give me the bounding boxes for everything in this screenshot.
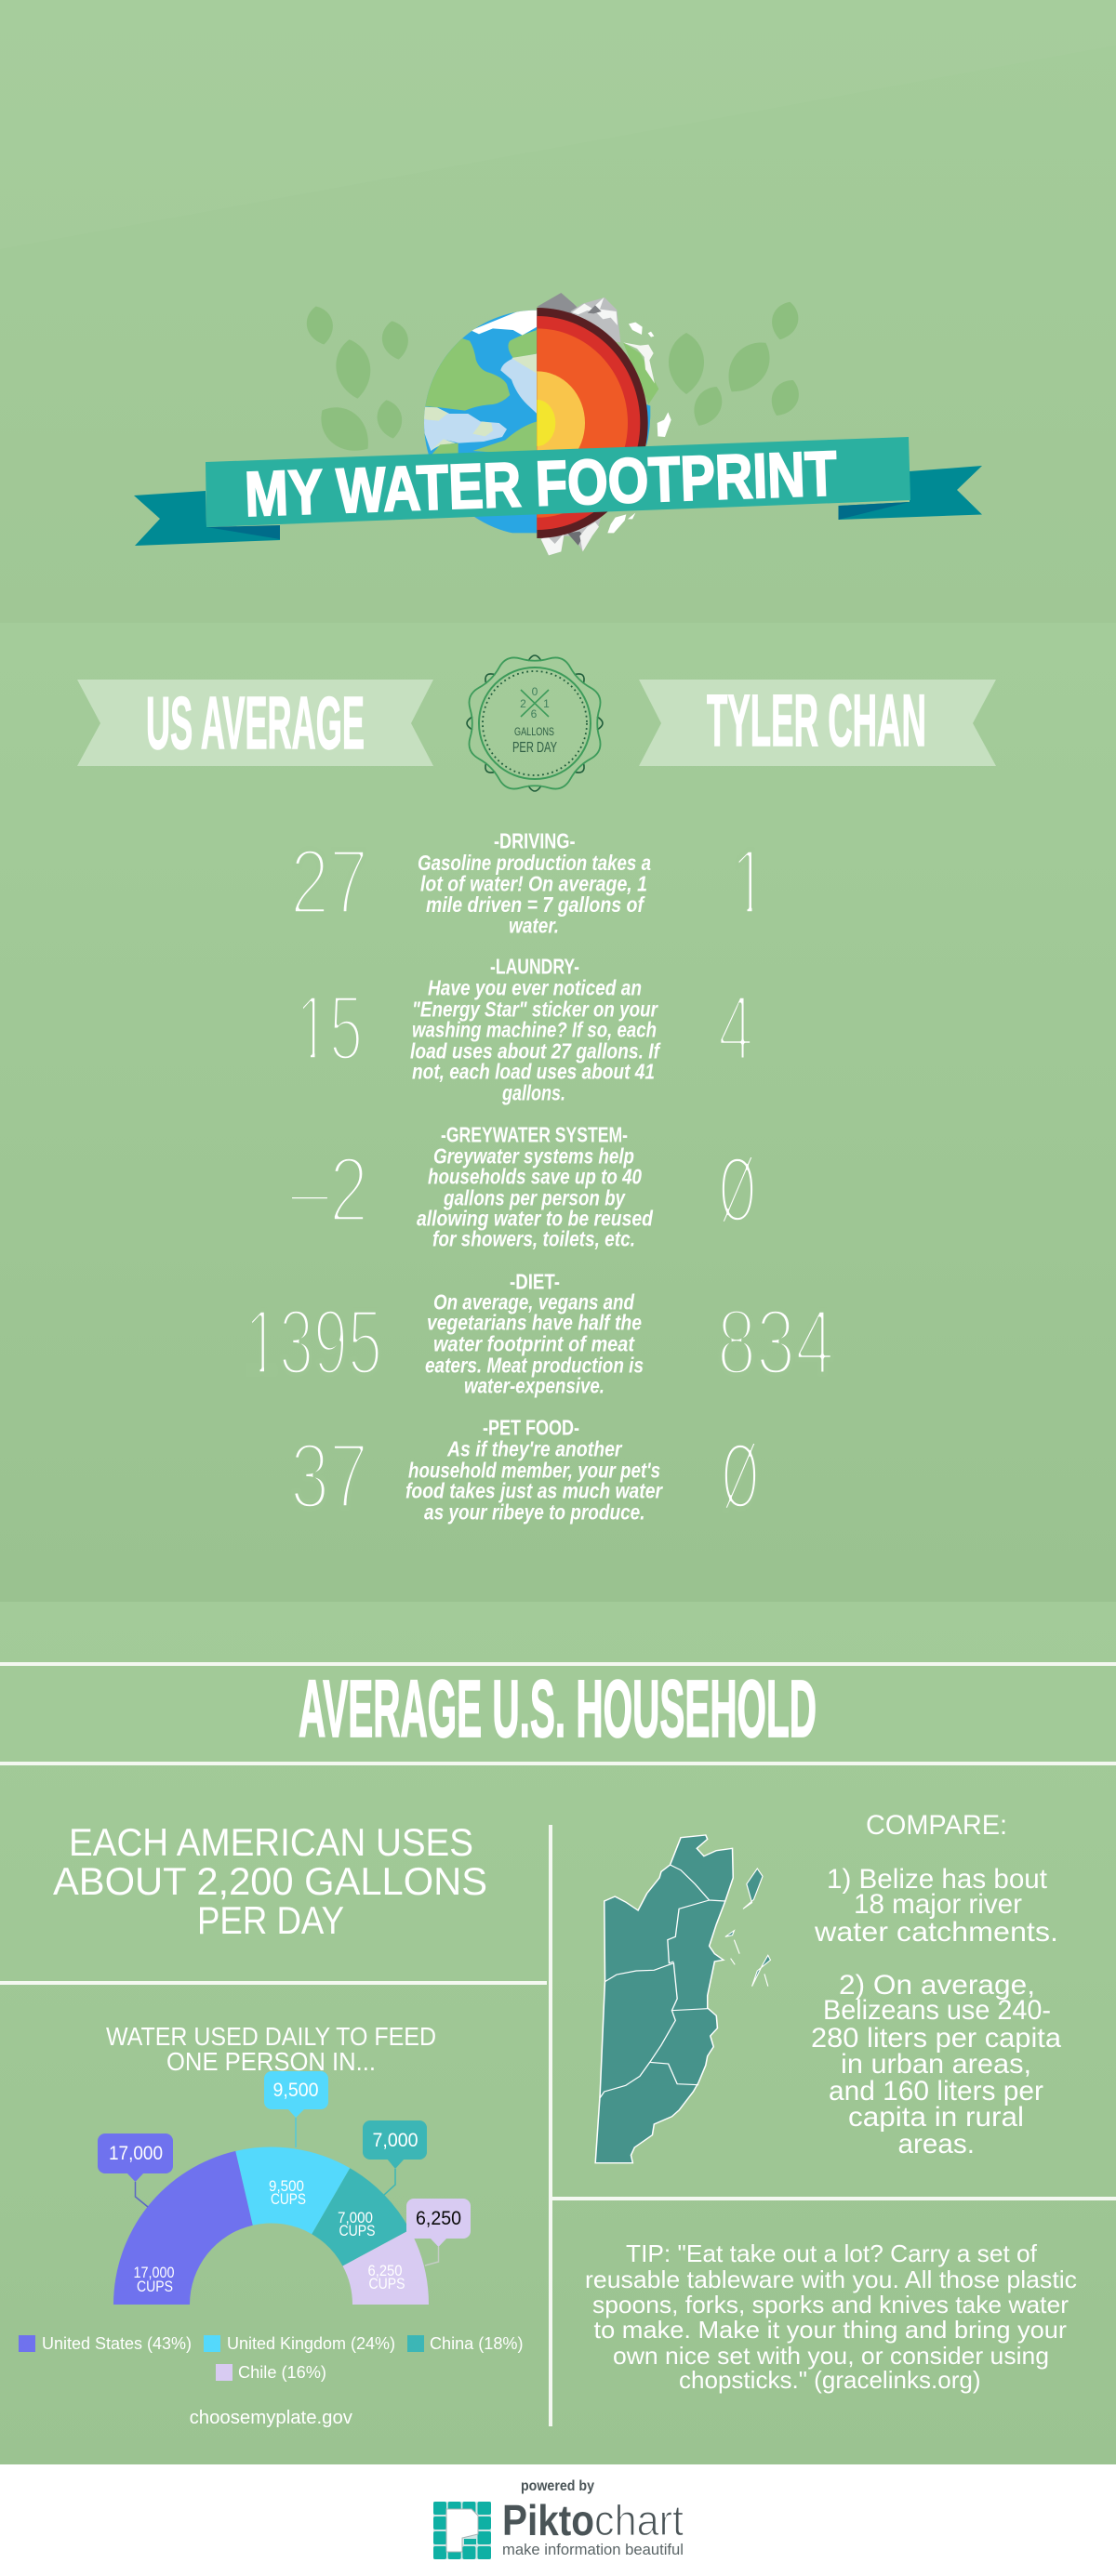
banner: Tyler Chan [639,679,996,766]
panel: tip: own nice set with you, or consider using [613,2342,1049,2370]
badge: 2016 gallons per day: 2 [520,697,526,710]
personal value: Ø [719,1138,756,1242]
legend: Chile (16%) [238,2362,326,2382]
description: as your ribeye to produce. [424,1500,645,1525]
title text: MY WATER FOOTPRINT [244,438,838,530]
semi-donut chart [113,2147,429,2305]
legend: United Kingdom (24%) [227,2333,395,2353]
description: washing machine? If so, each [412,1017,657,1041]
description: for showers, toilets, etc. [432,1227,635,1251]
row: pet food [290,1415,759,1528]
description: -DRIVING- [494,829,575,853]
background: household section [0,1602,1116,2464]
callout: 17,000 [98,2133,173,2207]
description [425,1270,644,1398]
description: gallons per person by [443,1186,626,1210]
description: On average, vegans and [433,1290,635,1314]
panel: compare Belize: 1) Belize has bout [827,1864,1048,1895]
description: load uses about 27 gallons. If [410,1039,661,1063]
US value: 1395 [245,1290,382,1394]
panel: compare Belize: Belizeans use 240- [823,1995,1051,2026]
badge: 2016 gallons per day: 1 [543,697,550,710]
badge: 2016 gallons per day [467,655,603,791]
description: allowing water to be reused [417,1207,654,1231]
description [418,829,651,937]
panel: per person use: PER DAY [197,1898,344,1942]
ribbon right tail [839,466,982,520]
description: -DIET- [510,1270,560,1294]
semi-donut chart: CUPS [339,2222,376,2239]
description: water. [509,913,559,937]
personal value: 1 [731,830,767,934]
semi-donut chart: 7,000 [338,2209,373,2226]
panel: tip: chopsticks." (gracelinks.org) [679,2366,980,2394]
panel: compare Belize: water catchments. [814,1917,1058,1948]
panel: tip [585,2239,1077,2394]
US value [245,1290,382,1394]
description: gallons. [501,1080,565,1104]
US value: 15 [296,976,363,1080]
panel: water used to feed one person [19,2022,523,2428]
semi-donut chart: 9,500 [269,2177,304,2195]
panel: tip: spoons, forks, sporks and knives take water [592,2291,1069,2318]
description: water-expensive. [464,1374,604,1398]
description: Greywater systems help [433,1143,634,1168]
US value: 27 [290,830,368,934]
badge: 2016 gallons per day: GALLONS [514,725,554,738]
tagline: make information beautiful [502,2541,684,2558]
personal value: 834 [717,1290,834,1394]
panel: compare Belize: COMPARE: [866,1810,1007,1841]
description [410,954,661,1104]
panel: tip: to make. Make it your thing and bring your [593,2316,1067,2344]
chart title: WATER USED DAILY TO FEED [106,2022,436,2051]
semi-donut chart: CUPS [368,2275,405,2292]
badge: 2016 gallons per day: 0 [532,685,538,698]
powered by: powered by [521,2478,594,2494]
title ribbon [134,437,982,546]
chart title [106,2022,436,2076]
US value [296,976,363,1080]
white cloud puffs [607,323,671,533]
callout: 17,000: 17,000 [109,2143,163,2164]
semi-donut chart: CUPS [271,2190,306,2208]
panel: compare Belize: 2) On average, [839,1970,1035,2001]
panel: compare Belize: and 160 liters per [829,2076,1043,2107]
panel: per person use [53,1820,487,1942]
description: -PET FOOD- [483,1415,579,1439]
callout: 7,000 [363,2120,427,2195]
description: As if they're another [446,1437,622,1461]
panel: compare Belize: in urban areas, [841,2049,1031,2080]
callout: 9,500 [264,2071,328,2147]
personal value: Ø [722,1424,759,1528]
legend: China (18%) [430,2333,523,2353]
semi-donut chart: 6,250 [368,2262,402,2279]
background: header section [0,0,1116,623]
footer: Piktochart logo [433,2478,684,2559]
illustration: earth globe [418,293,671,555]
core half [537,308,648,538]
description: Gasoline production takes a [418,851,651,875]
panel: per person use: EACH AMERICAN USES [69,1820,473,1864]
wordmark: chart [594,2496,684,2544]
description: -LAUNDRY- [490,954,579,978]
callout: 6,250 [406,2199,471,2266]
description [417,1123,654,1251]
personal value: 4 [718,976,753,1080]
description: food takes just as much water [405,1478,663,1502]
callout: 7,000: 7,000 [372,2130,418,2151]
panel: compare Belize [811,1810,1061,2160]
US value: 37 [290,1424,368,1528]
description [405,1415,663,1525]
description: not, each load uses about 41 [412,1060,655,1084]
row: driving [290,829,774,937]
chart title: ONE PERSON IN... [166,2047,376,2076]
panel: tip: reusable tableware with you. All those plastic [585,2266,1077,2293]
source: choosemyplate.gov [190,2408,352,2428]
panel: compare Belize: 280 liters per capita [811,2023,1061,2054]
description: eaters. Meat production is [425,1354,644,1378]
panel: tip: TIP: "Eat take out a lot? Carry a set of [626,2239,1038,2267]
background: comparison section [0,623,1116,1602]
ribbon left tail [134,491,280,546]
callout: 6,250: 6,250 [416,2208,461,2229]
panel: compare Belize: areas. [898,2129,975,2160]
map: Belize [595,1835,770,2163]
description: "Energy Star" sticker on your [412,997,658,1021]
legend: United States (43%) [42,2333,192,2353]
section heading: average U.S. household [0,1662,1116,1765]
panel: compare Belize: capita in rural [848,2102,1024,2133]
description: Have you ever noticed an [428,976,642,1000]
description: vegetarians have half the [427,1311,642,1335]
panel: per person use: ABOUT 2,200 GALLONS [53,1859,487,1903]
description: water footprint of meat [433,1331,635,1355]
row: greywater system [290,1123,756,1251]
dividers [0,1825,1116,2426]
US value: –2 [290,1138,368,1242]
description: -GREYWATER SYSTEM- [441,1123,628,1147]
badge: 2016 gallons per day: 6 [531,707,538,720]
banner: US average: US AVERAGE [146,681,365,764]
semi-donut chart: CUPS [137,2278,173,2295]
row: diet [245,1270,834,1398]
wordmark [502,2496,684,2544]
badge: 2016 gallons per day: PER DAY [512,740,557,756]
banner: US average [77,680,433,766]
semi-donut chart: 17,000 [134,2264,175,2281]
background: footer [0,2464,1116,2576]
legend [19,2333,523,2382]
wordmark: Pikto [502,2496,594,2544]
illustration: leaves [303,298,804,463]
description: lot of water! On average, 1 [420,872,647,896]
description: household member, your pet's [408,1458,660,1482]
mountains behind the core half [537,293,658,555]
description: households save up to 40 [428,1164,642,1188]
description: mile driven = 7 gallons of [426,892,645,917]
icon: logo mark [433,2502,491,2559]
callout: 9,500: 9,500 [273,2080,318,2101]
row: laundry [296,954,753,1104]
panel: compare Belize: 18 major river [854,1889,1022,1920]
earth half [418,304,537,533]
